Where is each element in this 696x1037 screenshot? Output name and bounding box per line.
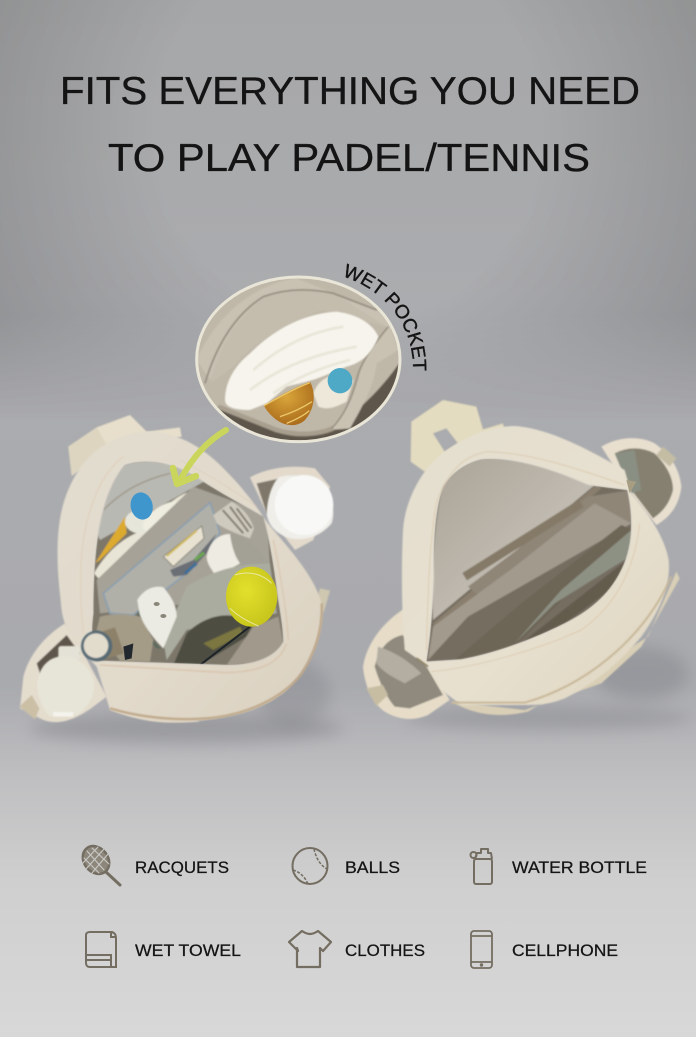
icon: water bottle — [470, 849, 492, 884]
legend: items that fit — [77, 841, 647, 968]
empty open backpack — [363, 400, 691, 730]
backpack shell — [57, 432, 322, 722]
label: wet towel: WET TOWEL — [135, 942, 241, 960]
seam and binding — [81, 457, 322, 719]
title — [60, 70, 640, 180]
label: balls: BALLS — [345, 859, 400, 877]
side pocket lower — [363, 608, 450, 719]
label: racquets: RACQUETS — [135, 859, 229, 877]
open backpack filled with gear — [19, 415, 343, 743]
interior lining — [421, 457, 638, 667]
icon: cellphone — [471, 931, 492, 968]
icon: wet towel — [86, 932, 116, 967]
cotton towel — [225, 312, 378, 410]
blue bottle cap — [128, 490, 155, 522]
bottom body — [451, 572, 680, 715]
icon: clothes — [289, 931, 331, 967]
label: clothes: CLOTHES — [345, 942, 425, 960]
small bottle — [81, 627, 124, 661]
arrow pointing to wet pocket — [182, 430, 226, 477]
arrow head — [173, 468, 196, 484]
label: cellphone: CELLPHONE — [512, 942, 618, 960]
wet pocket label text: WET POCKET — [346, 263, 427, 371]
icon: ball — [292, 848, 328, 884]
title: TO PLAY PADEL/TENNIS — [108, 137, 590, 180]
icon: racquet — [77, 841, 120, 885]
zipper pull — [626, 480, 636, 493]
title: FITS EVERYTHING YOU NEED — [60, 70, 640, 113]
gold cups — [264, 382, 314, 425]
interior contents — [87, 457, 287, 670]
backpack shell — [402, 426, 669, 705]
water bottle right — [267, 475, 333, 539]
seams — [416, 452, 671, 703]
carry strap — [411, 400, 505, 472]
icon: tennis ball — [226, 567, 277, 627]
curved label path — [342, 276, 413, 374]
inset: wet pocket close-up — [190, 270, 407, 447]
water bottle left — [37, 646, 94, 717]
side pocket upper — [601, 438, 681, 525]
label: water bottle: WATER BOTTLE — [512, 859, 647, 877]
blue cap — [328, 368, 352, 393]
